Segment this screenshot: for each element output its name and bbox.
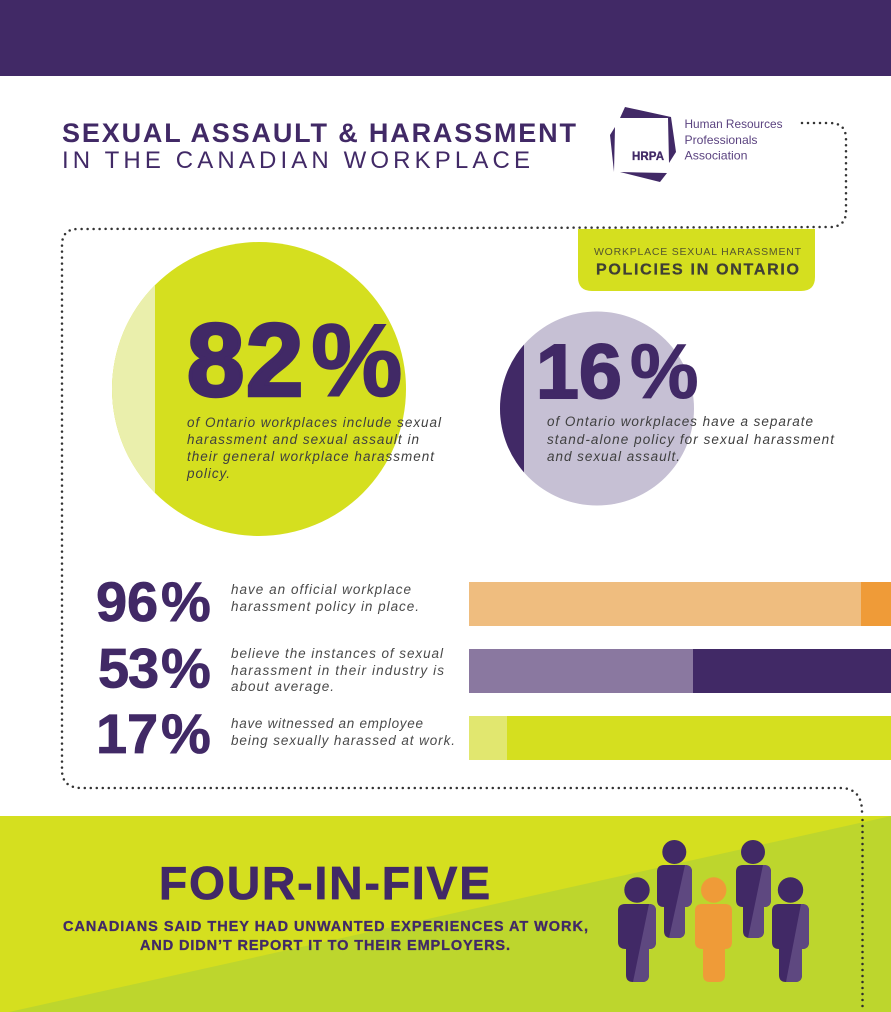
icon: person far right xyxy=(772,877,809,982)
stat row: 53%: believe the instances of sexual xyxy=(231,646,444,661)
stat row: 53%: about average. xyxy=(231,679,334,694)
icon: person far left xyxy=(618,877,656,982)
stat row: 17% xyxy=(96,702,891,765)
stat circle: 82%: of Ontario workplaces include sexual xyxy=(187,415,442,430)
title: IN THE CANADIAN WORKPLACE xyxy=(62,147,530,174)
stat circle: 16%: stand-alone policy for sexual harassment xyxy=(547,432,835,447)
stat circle: 16%: of Ontario workplaces have a separate xyxy=(547,414,813,429)
stat row: 53%: 53 xyxy=(98,636,159,700)
text: unwanted experiences: AND DIDN’T REPORT IT TO THEIR EMPLOYERS. xyxy=(140,938,510,954)
stat circle: 82%: harassment and sexual assault in xyxy=(187,432,419,447)
icon: person back right xyxy=(736,840,771,938)
stat circle: 82%: their general workplace harassment xyxy=(187,449,435,464)
stat row: 17%: % xyxy=(161,702,211,765)
logo: HRPA: HRPA xyxy=(632,151,664,163)
section label: policies in Ontario xyxy=(578,229,815,291)
stat circle: 16% xyxy=(500,312,834,506)
bottom banner xyxy=(0,816,891,1012)
stat circle: 16%: % xyxy=(630,329,698,415)
stat row: 96%: 96 xyxy=(96,570,158,633)
text: unwanted experiences xyxy=(63,919,588,954)
icon: person centre orange xyxy=(695,877,732,982)
logo: HRPA xyxy=(610,107,782,182)
stat row: 96% xyxy=(96,570,891,633)
stat circle: 16%: and sexual assault. xyxy=(547,449,680,464)
stat row: 96%: have an official workplace xyxy=(231,582,411,597)
section label: policies in Ontario: WORKPLACE SEXUAL HARASSMENT xyxy=(594,246,802,258)
stat row: 96%: % xyxy=(161,570,211,633)
stat circle: 82%: 82 xyxy=(187,302,303,418)
text: unwanted experiences: CANADIANS SAID THEY HAD UNWANTED EXPERIENCES AT WORK, xyxy=(63,919,588,935)
stat circle: 16%: 16 xyxy=(536,329,622,415)
stat circle: 82%: % xyxy=(311,302,403,418)
dotted connector: upper section outline xyxy=(62,123,862,816)
stat circle: 82% xyxy=(100,230,442,540)
title xyxy=(62,118,576,174)
stat row: 53% xyxy=(98,636,891,700)
logo: HRPA: Human Resources xyxy=(684,117,782,131)
stat row: 53%: harassment in their industry is xyxy=(231,663,444,678)
stat row: 17%: have witnessed an employee xyxy=(231,716,423,731)
dotted connector over banner xyxy=(861,820,864,1012)
stat row: 17%: 17 xyxy=(96,702,158,765)
title: SEXUAL ASSAULT & HARASSMENT xyxy=(62,118,576,148)
stat row: 96%: harassment policy in place. xyxy=(231,599,419,614)
section label: policies in Ontario: POLICIES IN ONTARIO xyxy=(596,262,799,278)
icon: people group xyxy=(618,840,809,982)
top banner xyxy=(0,0,891,76)
icon: person back left xyxy=(657,840,692,938)
stat circle: 82%: policy. xyxy=(186,466,230,481)
logo: HRPA: Association xyxy=(684,148,748,162)
stat row: 17%: being sexually harassed at work. xyxy=(231,733,455,748)
stat row: 53%: % xyxy=(161,636,211,700)
heading: four-in-five: FOUR-IN-FIVE xyxy=(159,857,490,909)
logo: HRPA: Professionals xyxy=(684,133,758,147)
